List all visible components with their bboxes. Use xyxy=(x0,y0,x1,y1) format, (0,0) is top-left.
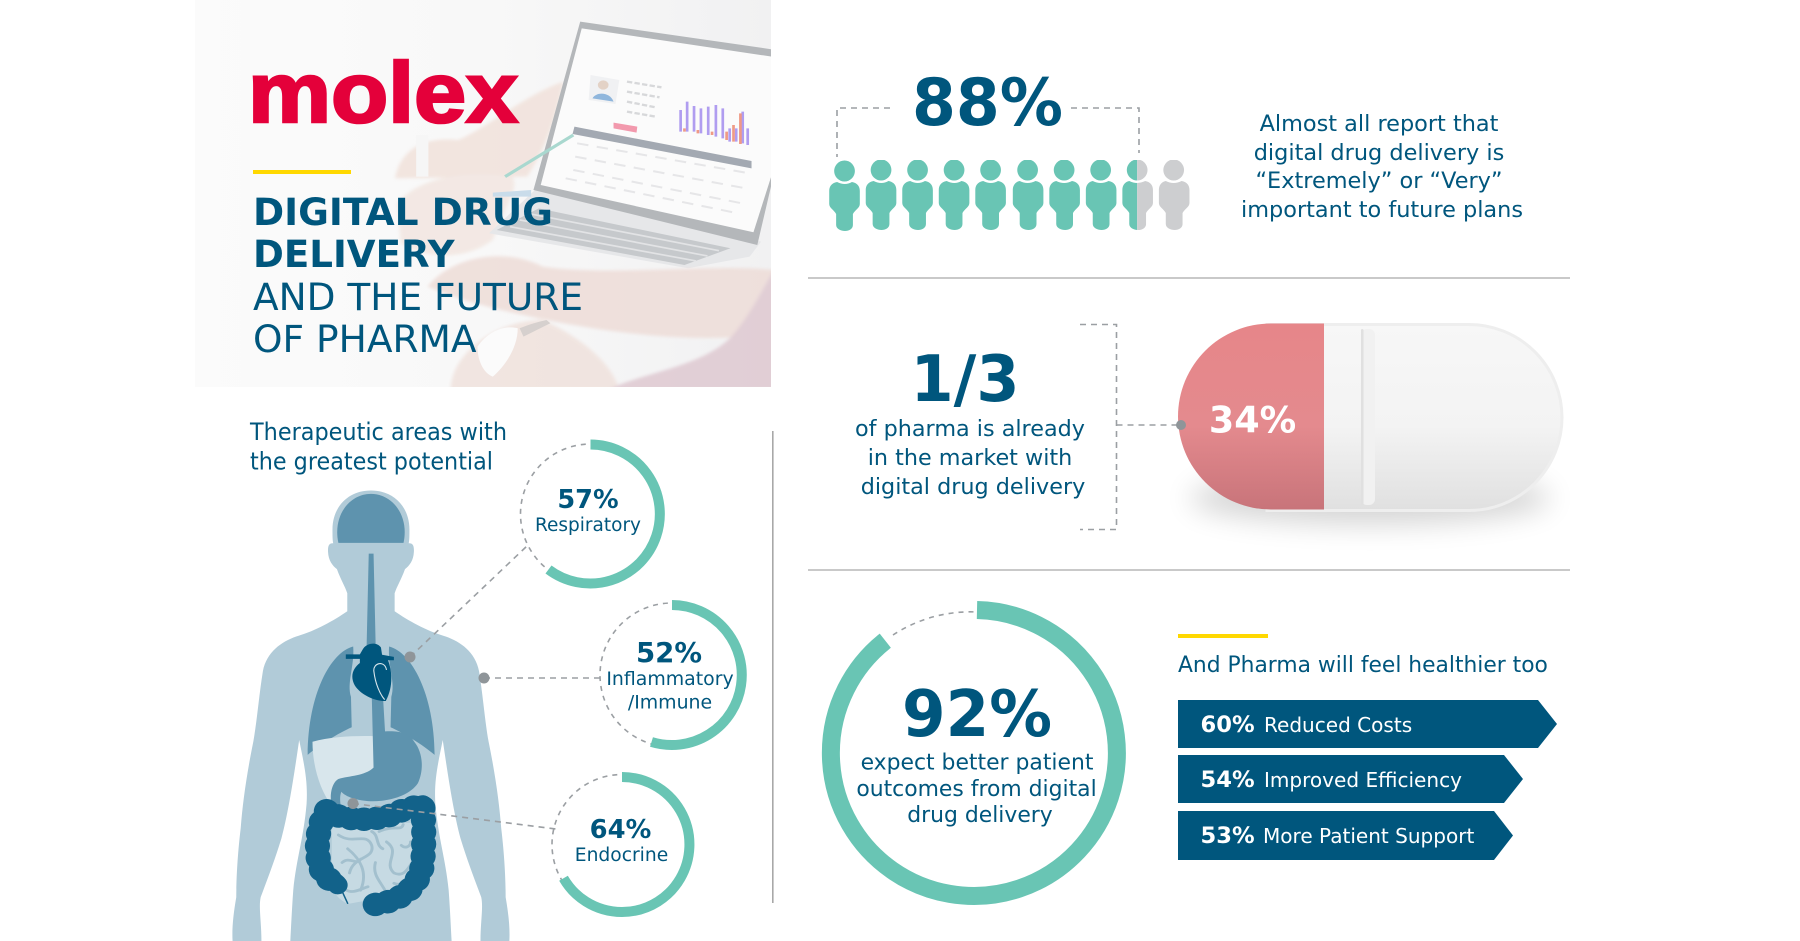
stat: 92%: 92% xyxy=(902,678,1052,752)
arrow bar: 60%: 60% xyxy=(1200,712,1255,738)
donut: 64% endocrine xyxy=(552,774,692,914)
text: almost all report xyxy=(1241,111,1523,223)
colon xyxy=(317,805,424,905)
pill label 34%: 34% xyxy=(1209,398,1296,442)
heading: And Pharma will feel healthier too xyxy=(1178,653,1548,678)
text: expect better: expect better patient xyxy=(861,750,1094,776)
text: almost all report: “Extremely” or “Very” xyxy=(1255,168,1503,194)
ring xyxy=(831,610,1117,896)
text: of pharma xyxy=(855,416,1085,500)
panel: 88 percent xyxy=(829,66,1523,231)
dashed remainder xyxy=(893,612,977,635)
text: expect better: drug delivery xyxy=(907,803,1053,828)
donut: 64% endocrine: 64% xyxy=(590,815,652,845)
yellow accent line xyxy=(1178,634,1268,638)
donut: 52% inflammatory immune: /Immune xyxy=(628,692,712,714)
photo: hands and laptop, faded xyxy=(393,0,771,387)
text: expect better xyxy=(856,750,1097,828)
panel: one third xyxy=(855,324,1562,530)
divider xyxy=(808,569,1570,571)
bracket xyxy=(1080,324,1180,530)
arrow bar: 53% xyxy=(1178,811,1513,860)
donut: 52% inflammatory immune: 52% xyxy=(636,636,702,669)
title: DIGITAL DRUG xyxy=(253,190,553,234)
vertical divider xyxy=(772,431,774,903)
people icons: 9 of 10 xyxy=(829,160,1189,231)
donut: 57% respiratory xyxy=(520,444,660,584)
donut: 52% inflammatory immune xyxy=(600,603,744,747)
text: of pharma: digital drug delivery xyxy=(861,474,1085,500)
panel: header photo with title xyxy=(252,0,771,387)
panel: pharma benefits xyxy=(1178,634,1557,860)
title: DELIVERY xyxy=(253,232,456,276)
pill xyxy=(1176,324,1562,524)
stat: 88%: 88% xyxy=(912,66,1063,141)
title xyxy=(253,190,583,361)
stomach xyxy=(331,693,422,806)
yellow accent line xyxy=(253,170,351,174)
arrow bar: 60% xyxy=(1178,700,1557,748)
text: of pharma: in the market with xyxy=(868,445,1072,471)
arrow bar: 53%: 53% xyxy=(1200,823,1255,849)
arrow bar: 54% xyxy=(1178,755,1523,803)
heading: therapeutic areas xyxy=(249,418,507,476)
arrow bar: 60%: Reduced Costs xyxy=(1264,713,1412,737)
text: almost all report: Almost all report that xyxy=(1260,111,1499,137)
laptop base xyxy=(489,190,761,268)
divider xyxy=(808,277,1570,279)
text: almost all report: digital drug delivery is xyxy=(1254,140,1504,166)
small intestine xyxy=(332,823,415,904)
donut: 64% endocrine: Endocrine xyxy=(575,845,668,866)
heading: therapeutic areas: Therapeutic areas with xyxy=(249,418,507,446)
panel: therapeutic areas xyxy=(232,418,744,941)
donut: 57% respiratory: 57% xyxy=(557,485,619,515)
donut: 52% inflammatory immune: Inflammatory xyxy=(606,668,734,690)
heart xyxy=(346,644,394,701)
title: OF PHARMA xyxy=(253,317,477,361)
brain xyxy=(337,494,405,543)
arrow bar: 53%: More Patient Support xyxy=(1263,824,1474,848)
panel: 92 percent donut xyxy=(831,610,1117,896)
text: of pharma: of pharma is already xyxy=(855,416,1085,442)
anatomy figure xyxy=(232,490,510,941)
liver xyxy=(312,736,375,806)
lungs xyxy=(308,646,435,755)
title: AND THE FUTURE xyxy=(253,275,583,319)
pen xyxy=(505,135,573,177)
body silhouette xyxy=(232,490,510,941)
donut: 57% respiratory: Respiratory xyxy=(535,515,641,536)
stat: 1/3: 1/3 xyxy=(910,343,1020,417)
leader lines xyxy=(348,546,600,829)
heading: therapeutic areas: the greatest potential xyxy=(250,448,493,476)
text: almost all report: important to future plans xyxy=(1241,197,1523,223)
logo: molex: molex xyxy=(248,46,518,141)
bracket xyxy=(837,108,1139,157)
lower arms and shirt xyxy=(428,256,776,390)
arrow bar: 54%: 54% xyxy=(1200,767,1255,793)
text: expect better: outcomes from digital xyxy=(856,777,1097,802)
esophagus xyxy=(367,554,376,650)
laptop screen xyxy=(533,22,776,245)
arrow bar: 54%: Improved Efficiency xyxy=(1264,768,1462,792)
